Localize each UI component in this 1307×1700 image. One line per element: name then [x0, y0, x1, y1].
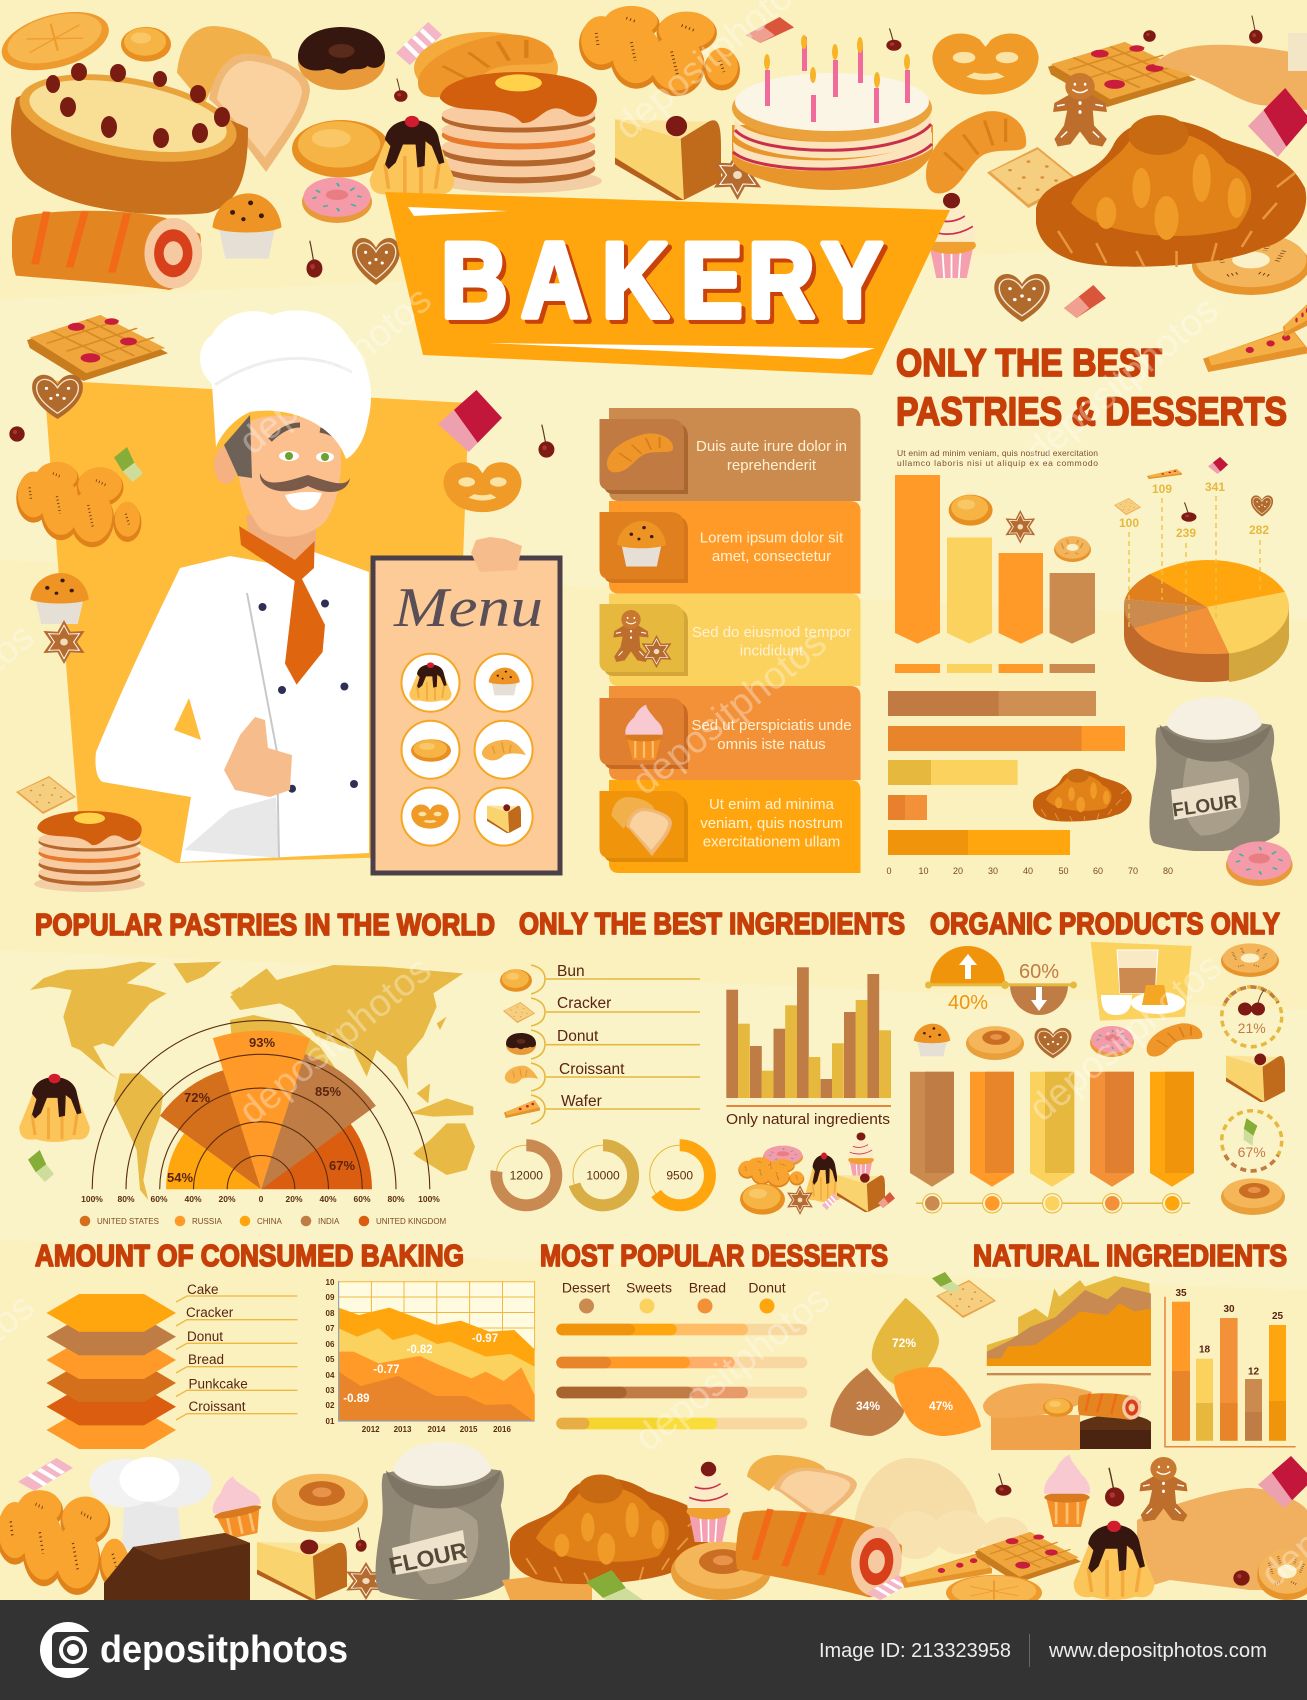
chef	[95, 310, 371, 862]
axis labels	[886, 866, 1173, 876]
ring values: 9500	[666, 1168, 693, 1182]
menu heading: Menu	[393, 577, 543, 639]
polar legend: UNITED STATES	[97, 1217, 159, 1226]
watermark: depositphotos	[1018, 289, 1226, 473]
wedge values: 85%	[315, 1084, 341, 1099]
dark loaf	[104, 1533, 250, 1600]
panel 3: incididunt	[740, 642, 804, 660]
polar legend: INDIA	[318, 1217, 340, 1226]
horizontal bar chart	[886, 691, 1173, 876]
hexagon labels: Croissant	[188, 1399, 246, 1414]
series values: -0.97	[472, 1333, 498, 1345]
dashed ring 67%	[1222, 1111, 1282, 1171]
y axis labels: 03	[326, 1386, 335, 1395]
moustache	[260, 473, 350, 492]
series values: -0.82	[406, 1344, 433, 1356]
chef panel background	[44, 380, 469, 863]
series values: -0.77	[373, 1364, 400, 1376]
polar legend: CHINA	[257, 1217, 283, 1226]
organic split indicator	[925, 946, 1077, 1015]
polar area chart	[81, 1021, 440, 1204]
dessert progress bars	[556, 1324, 807, 1429]
desserts legend	[562, 1280, 786, 1314]
axis labels: 60%	[353, 1194, 371, 1204]
dashed ring 67%: 67%	[1238, 1144, 1266, 1160]
hexagon labels: Donut	[187, 1329, 223, 1344]
petal chart	[830, 1298, 981, 1436]
heading: only the best pastries: ONLY THE BEST	[896, 342, 1162, 385]
area chart	[326, 1278, 535, 1434]
hexagon stack	[46, 1282, 298, 1449]
long wafer	[502, 1570, 592, 1600]
panel 1	[600, 408, 860, 501]
bar values	[1175, 1288, 1283, 1378]
intro text: Ut enim ad minim veniam, quis nostrud exercitation	[897, 448, 1098, 458]
thumbs-up hand	[224, 717, 292, 797]
title banner	[385, 192, 950, 375]
heading: amount of baking: AMOUNT OF CONSUMED BAKING	[35, 1238, 464, 1273]
axis labels: 50	[1058, 866, 1069, 876]
intro text	[897, 448, 1098, 468]
series values	[343, 1333, 498, 1405]
pie icons	[1114, 457, 1273, 522]
foods around chef	[9, 315, 554, 892]
hair	[224, 415, 252, 478]
desserts legend: Donut	[748, 1280, 786, 1296]
organic food row	[914, 1023, 1202, 1060]
pie labels: 100	[1119, 516, 1139, 530]
timeline dots	[916, 1194, 1190, 1213]
organic right column	[1221, 943, 1285, 1215]
hexagon labels: Cracker	[186, 1305, 234, 1320]
chef hat	[200, 310, 371, 459]
panel 5: veniam, quis nostrum	[700, 815, 843, 832]
axis labels: 10	[918, 866, 929, 876]
ring values	[510, 1168, 693, 1182]
image id: Image ID: 213323958	[819, 1640, 1011, 1662]
watermark: depositphotos	[231, 949, 439, 1133]
wedge values: 67%	[329, 1158, 355, 1173]
pie labels: 282	[1249, 523, 1269, 537]
heading: only the best pastries	[896, 342, 1287, 434]
organic drink illustration	[1091, 942, 1192, 1021]
polar legend: UNITED KINGDOM	[376, 1217, 447, 1226]
website: www.depositphotos.com	[1048, 1640, 1267, 1662]
bar values: 18	[1199, 1344, 1210, 1356]
axis labels: 100%	[81, 1194, 103, 1204]
panel 4: omnis iste natus	[717, 736, 826, 753]
y axis labels: 01	[326, 1417, 335, 1426]
panel 3	[600, 594, 860, 686]
ingredient names: Donut	[557, 1028, 599, 1045]
hexagon labels: Punkcake	[188, 1376, 248, 1392]
up arrow	[959, 954, 977, 979]
down arrow	[1031, 987, 1047, 1011]
neck	[246, 515, 316, 568]
chart caption: Only natural ingredients	[726, 1111, 890, 1128]
ingredient names: Wafer	[561, 1093, 602, 1110]
axis labels: 40	[1023, 866, 1033, 876]
natural area chart	[987, 1276, 1151, 1375]
ingredient names	[557, 963, 625, 1110]
hexagon labels: Bread	[188, 1352, 224, 1367]
desserts legend: Dessert	[562, 1280, 610, 1296]
panel 5	[600, 780, 860, 873]
pie labels: 239	[1176, 526, 1196, 540]
footer wordmark: depositphotos	[100, 1629, 348, 1671]
menu board	[373, 537, 560, 873]
footer bar	[0, 1600, 1307, 1700]
y axis labels: 07	[326, 1324, 335, 1333]
organic arrow bars	[910, 1072, 1194, 1213]
axis labels: 0	[886, 866, 892, 876]
axis labels: 70	[1128, 866, 1138, 876]
pie labels	[1119, 480, 1269, 540]
ear	[214, 446, 238, 484]
loaf group	[983, 1383, 1151, 1450]
panel 1: reprehenderit	[727, 457, 817, 474]
menu items	[409, 662, 526, 833]
jacket	[95, 552, 369, 862]
x axis labels: 2014	[428, 1425, 446, 1434]
scarf	[239, 526, 325, 685]
panel 4: Sed ut perspiciatis unde	[691, 717, 852, 734]
hexagon labels	[186, 1282, 248, 1414]
organic split indicator: 40%	[948, 992, 988, 1014]
buttons	[258, 600, 358, 793]
desserts legend: Bread	[689, 1280, 726, 1296]
axis labels: 0	[259, 1194, 264, 1204]
mouth	[285, 492, 322, 510]
long bread	[1154, 45, 1307, 110]
polar legend	[80, 1216, 447, 1226]
top food strip	[0, 1, 1307, 372]
panel 1: Duis aute irure dolor in	[696, 438, 847, 455]
wedge values: 93%	[249, 1035, 275, 1050]
ingredient names: Cracker	[557, 995, 611, 1012]
ring values: 10000	[586, 1168, 620, 1182]
footer logo icon	[40, 1622, 96, 1678]
y axis labels: 05	[326, 1355, 335, 1364]
y axis labels	[326, 1278, 335, 1426]
panel 2	[600, 501, 860, 594]
panel 5: exercitationem ullam	[703, 834, 840, 851]
big bread	[1137, 1488, 1307, 1590]
cracker and jelly	[932, 1272, 996, 1318]
x axis labels: 2015	[460, 1425, 478, 1434]
petal values: 34%	[856, 1399, 880, 1413]
y axis labels: 09	[326, 1293, 335, 1302]
pie labels: 109	[1152, 482, 1172, 496]
axis labels: 40%	[184, 1194, 202, 1204]
axis labels: 20	[953, 866, 963, 876]
bar values: 30	[1223, 1304, 1235, 1315]
bar values: 12	[1248, 1366, 1259, 1378]
ingredient names: Bun	[557, 963, 585, 980]
petal values: 47%	[929, 1399, 953, 1413]
panel 2: Lorem ipsum dolor sit	[700, 530, 844, 546]
percentages: 60%	[1019, 961, 1059, 983]
desserts legend: Sweets	[626, 1280, 672, 1296]
big cake with cherries	[11, 60, 248, 215]
axis labels: 20%	[218, 1194, 236, 1204]
wedge values	[167, 1035, 355, 1185]
eyes and brows	[270, 425, 342, 462]
bar values: 35	[1175, 1288, 1187, 1299]
dough	[854, 1458, 979, 1541]
y axis labels: 06	[326, 1340, 335, 1349]
menu circles	[402, 654, 533, 846]
axis labels: 30	[988, 866, 998, 876]
list panels	[600, 408, 860, 873]
polar legend: RUSSIA	[192, 1217, 222, 1226]
petal values	[856, 1336, 953, 1413]
arrow bar chart	[895, 475, 1095, 673]
y axis labels: 10	[326, 1278, 335, 1287]
food group	[738, 1132, 895, 1215]
x axis labels	[362, 1425, 511, 1434]
leader lines	[176, 1296, 298, 1420]
ingredient names: Croissant	[559, 1061, 625, 1078]
panel 3: Sed do eiusmod tempor	[692, 624, 851, 641]
y axis labels: 04	[326, 1371, 335, 1380]
dashed ring 21%: 21%	[1238, 1020, 1266, 1036]
axis labels: 80%	[387, 1194, 405, 1204]
panel 2: amet, consectetur	[712, 548, 831, 565]
y axis labels: 08	[326, 1309, 335, 1318]
y axis labels: 02	[326, 1401, 335, 1410]
ingredients list	[500, 963, 700, 1124]
natural stacked bars	[1165, 1288, 1296, 1447]
dashed ring 21%	[1222, 987, 1282, 1047]
bottom food strip	[0, 1442, 1307, 1611]
heading: best ingredients: ONLY THE BEST INGREDIENTS	[519, 906, 905, 941]
face	[237, 416, 341, 537]
bottom food strip: FLOUR	[387, 1537, 470, 1579]
axis labels: 80%	[117, 1194, 135, 1204]
title shadow: BAKERY	[445, 226, 887, 345]
flan and jelly beside map	[19, 1074, 90, 1182]
bar values: 25	[1272, 1311, 1283, 1322]
croissant behind pancakes	[414, 32, 558, 104]
ring charts	[496, 1145, 710, 1205]
axis labels: 60	[1093, 866, 1103, 876]
pie labels: 341	[1205, 480, 1225, 494]
hexagon labels: Cake	[187, 1282, 219, 1297]
natural ingredients bar chart	[726, 967, 891, 1128]
petal values: 72%	[892, 1336, 916, 1350]
watermark: depositphotos	[624, 622, 835, 803]
ring values: 12000	[510, 1168, 543, 1182]
small pie, flour sack, donut	[1033, 697, 1293, 886]
panel 4	[600, 686, 860, 780]
series values: -0.89	[343, 1393, 370, 1405]
intro text: ullamco laboris nisi ut aliquip ex ea commodo	[897, 458, 1098, 468]
x axis labels: 2013	[394, 1425, 412, 1434]
birthday cake with candles	[732, 35, 933, 190]
axis labels	[81, 1194, 440, 1204]
axis labels: 100%	[418, 1194, 440, 1204]
title: BAKERY	[441, 222, 883, 341]
axis labels: 80	[1163, 866, 1173, 876]
hand holding menu	[471, 537, 522, 572]
x axis labels: 2012	[362, 1425, 380, 1434]
wedge values: 72%	[184, 1090, 210, 1105]
axis labels: 40%	[319, 1194, 337, 1204]
axis labels: 60%	[150, 1194, 168, 1204]
panel 5: Ut enim ad minima	[709, 796, 835, 813]
wedge values: 54%	[167, 1170, 193, 1185]
x axis labels: 2016	[493, 1425, 511, 1434]
small pie, flour sack, donut: FLOUR	[1171, 792, 1239, 821]
axis labels: 20%	[285, 1194, 303, 1204]
watermark: depositphotos	[627, 1278, 838, 1459]
heading: popular pastries: POPULAR PASTRIES IN THE WORLD	[35, 907, 495, 942]
3D pie chart	[1124, 496, 1289, 682]
heading: popular desserts: MOST POPULAR DESSERTS	[540, 1238, 888, 1273]
watermark: depositphotos	[231, 279, 439, 463]
world map	[30, 962, 475, 1200]
watermark: depositphotos	[1021, 946, 1229, 1130]
